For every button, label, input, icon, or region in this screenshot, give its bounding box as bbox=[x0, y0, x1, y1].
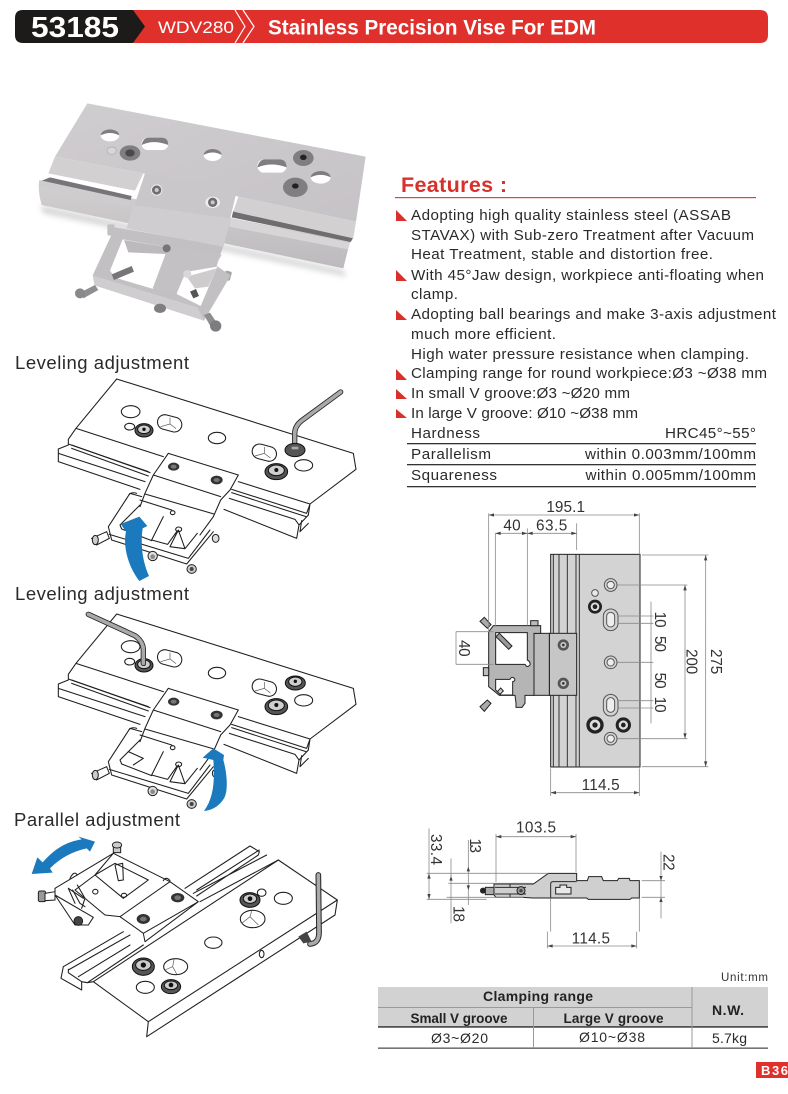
specification table: within 0.003mm/100mm bbox=[584, 446, 756, 463]
lower rail bbox=[39, 180, 350, 268]
bracket bbox=[127, 173, 237, 247]
bullet text: Clamping range for round workpiece:Ø3 ~Ø38 mm bbox=[411, 365, 767, 382]
dimension labels: 22 bbox=[659, 854, 676, 871]
bullet text: clamp. bbox=[411, 286, 458, 303]
bullet text: With 45°Jaw design, workpiece anti-floating when bbox=[411, 267, 764, 284]
dimension labels: 103.5 bbox=[516, 820, 556, 837]
bullet text: Adopting high quality stainless steel (ASSAB bbox=[411, 207, 731, 224]
base plate bbox=[551, 554, 640, 767]
screws bbox=[113, 845, 121, 853]
dimension labels: 195.1 bbox=[546, 499, 585, 516]
clamp frame bbox=[93, 227, 231, 321]
bullet text: High water pressure resistance when clamping. bbox=[411, 346, 749, 363]
dimension labels: 114.5 bbox=[582, 777, 620, 794]
line drawing: leveling adjustment with wrench right bbox=[58, 379, 356, 581]
black model number tab bbox=[15, 10, 145, 43]
caption: leveling adjustment 2: Leveling adjustment bbox=[15, 583, 189, 604]
specification table bbox=[407, 425, 756, 487]
technical drawing: top view bbox=[455, 499, 724, 796]
arrow: rotation bbox=[32, 837, 95, 874]
product title: Stainless Precision Vise For EDM bbox=[268, 16, 596, 40]
dimension labels: 13 bbox=[466, 838, 483, 853]
dimension labels: 33.4 bbox=[427, 834, 444, 865]
holes bbox=[274, 892, 292, 904]
unit label: Unit:mm bbox=[721, 972, 768, 984]
caption: parallel adjustment: Parallel adjustment bbox=[14, 809, 180, 830]
bullet text bbox=[411, 207, 777, 422]
dimension labels: 40 bbox=[503, 518, 521, 535]
table values: 5.7kg bbox=[712, 1030, 747, 1046]
header banner bbox=[15, 10, 768, 44]
table headers: Large V groove bbox=[564, 1011, 664, 1026]
icon: hex wrench bbox=[298, 875, 319, 944]
table values: Ø3~Ø20 bbox=[431, 1030, 488, 1046]
product photo bbox=[39, 103, 366, 332]
heading: features: Features : bbox=[401, 173, 507, 197]
red title bar bbox=[120, 10, 768, 43]
caption: leveling adjustment 1: Leveling adjustment bbox=[15, 352, 189, 373]
line drawing: leveling adjustment with wrench left bbox=[58, 614, 356, 811]
model code: WDV280 bbox=[158, 19, 234, 37]
bracket and clamp bbox=[480, 617, 577, 711]
knobs behind frame bbox=[107, 224, 115, 236]
bullet markers bbox=[396, 210, 407, 418]
bullet text: much more efficient. bbox=[411, 326, 556, 343]
table headers: N.W. bbox=[712, 1002, 744, 1018]
dimension labels: 10 bbox=[651, 612, 668, 628]
icon: hex wrench bbox=[285, 392, 341, 457]
product number text: 53185 bbox=[31, 12, 119, 44]
clamping range table bbox=[378, 987, 768, 1049]
photo holes bbox=[101, 129, 119, 141]
specification table: Squareness bbox=[411, 467, 497, 484]
top plate bbox=[55, 103, 366, 222]
bullet text: Heat Treatment, stable and distortion free. bbox=[411, 246, 713, 263]
table headers: Small V groove bbox=[410, 1011, 508, 1026]
screws bbox=[80, 285, 98, 298]
technical drawing: side view bbox=[427, 820, 676, 948]
bracket top bbox=[105, 882, 198, 942]
dimension labels: 50 bbox=[651, 636, 668, 652]
line drawing: parallel adjustment bbox=[32, 837, 337, 1037]
table headers bbox=[410, 988, 744, 1026]
bullet text: Adopting ball bearings and make 3-axis adjustment bbox=[411, 306, 777, 323]
dimension labels: 200 bbox=[683, 649, 700, 674]
dimension labels bbox=[455, 499, 724, 794]
dimension labels bbox=[427, 820, 676, 947]
chevron separator bbox=[235, 10, 254, 43]
icon: hex wrench bbox=[88, 614, 143, 663]
specification table: within 0.005mm/100mm bbox=[584, 467, 756, 484]
bullet text: In small V groove:Ø3 ~Ø20 mm bbox=[411, 385, 630, 402]
dimension lines bbox=[456, 513, 708, 796]
dimension labels: 18 bbox=[449, 906, 466, 922]
dimension labels: 114.5 bbox=[572, 930, 610, 947]
bullet text: In large V groove: Ø10 ~Ø38 mm bbox=[411, 405, 638, 422]
dimension labels: 63.5 bbox=[536, 518, 567, 535]
table headers: Clamping range bbox=[483, 988, 593, 1004]
dimension lines bbox=[427, 828, 665, 948]
arrow: leveling up bbox=[121, 517, 149, 581]
specification table: Hardness bbox=[411, 425, 480, 442]
specification table: Parallelism bbox=[411, 446, 491, 463]
bullet text: STAVAX) with Sub-zero Treatment after Vacuum bbox=[411, 227, 754, 244]
dimension labels: 50 bbox=[651, 673, 668, 689]
features bullet list bbox=[396, 207, 777, 422]
plate holes and bolts bbox=[586, 579, 631, 745]
side profile bbox=[494, 873, 639, 899]
dimension labels: 40 bbox=[455, 640, 472, 657]
dimension labels: 275 bbox=[707, 649, 724, 674]
page tag: B36 bbox=[761, 1063, 788, 1078]
table values bbox=[431, 1029, 747, 1046]
arrow: leveling up right bbox=[203, 748, 227, 811]
dimension labels: 10 bbox=[651, 697, 668, 713]
table values: Ø10~Ø38 bbox=[579, 1029, 645, 1045]
specification table: HRC45°~55° bbox=[665, 425, 756, 442]
